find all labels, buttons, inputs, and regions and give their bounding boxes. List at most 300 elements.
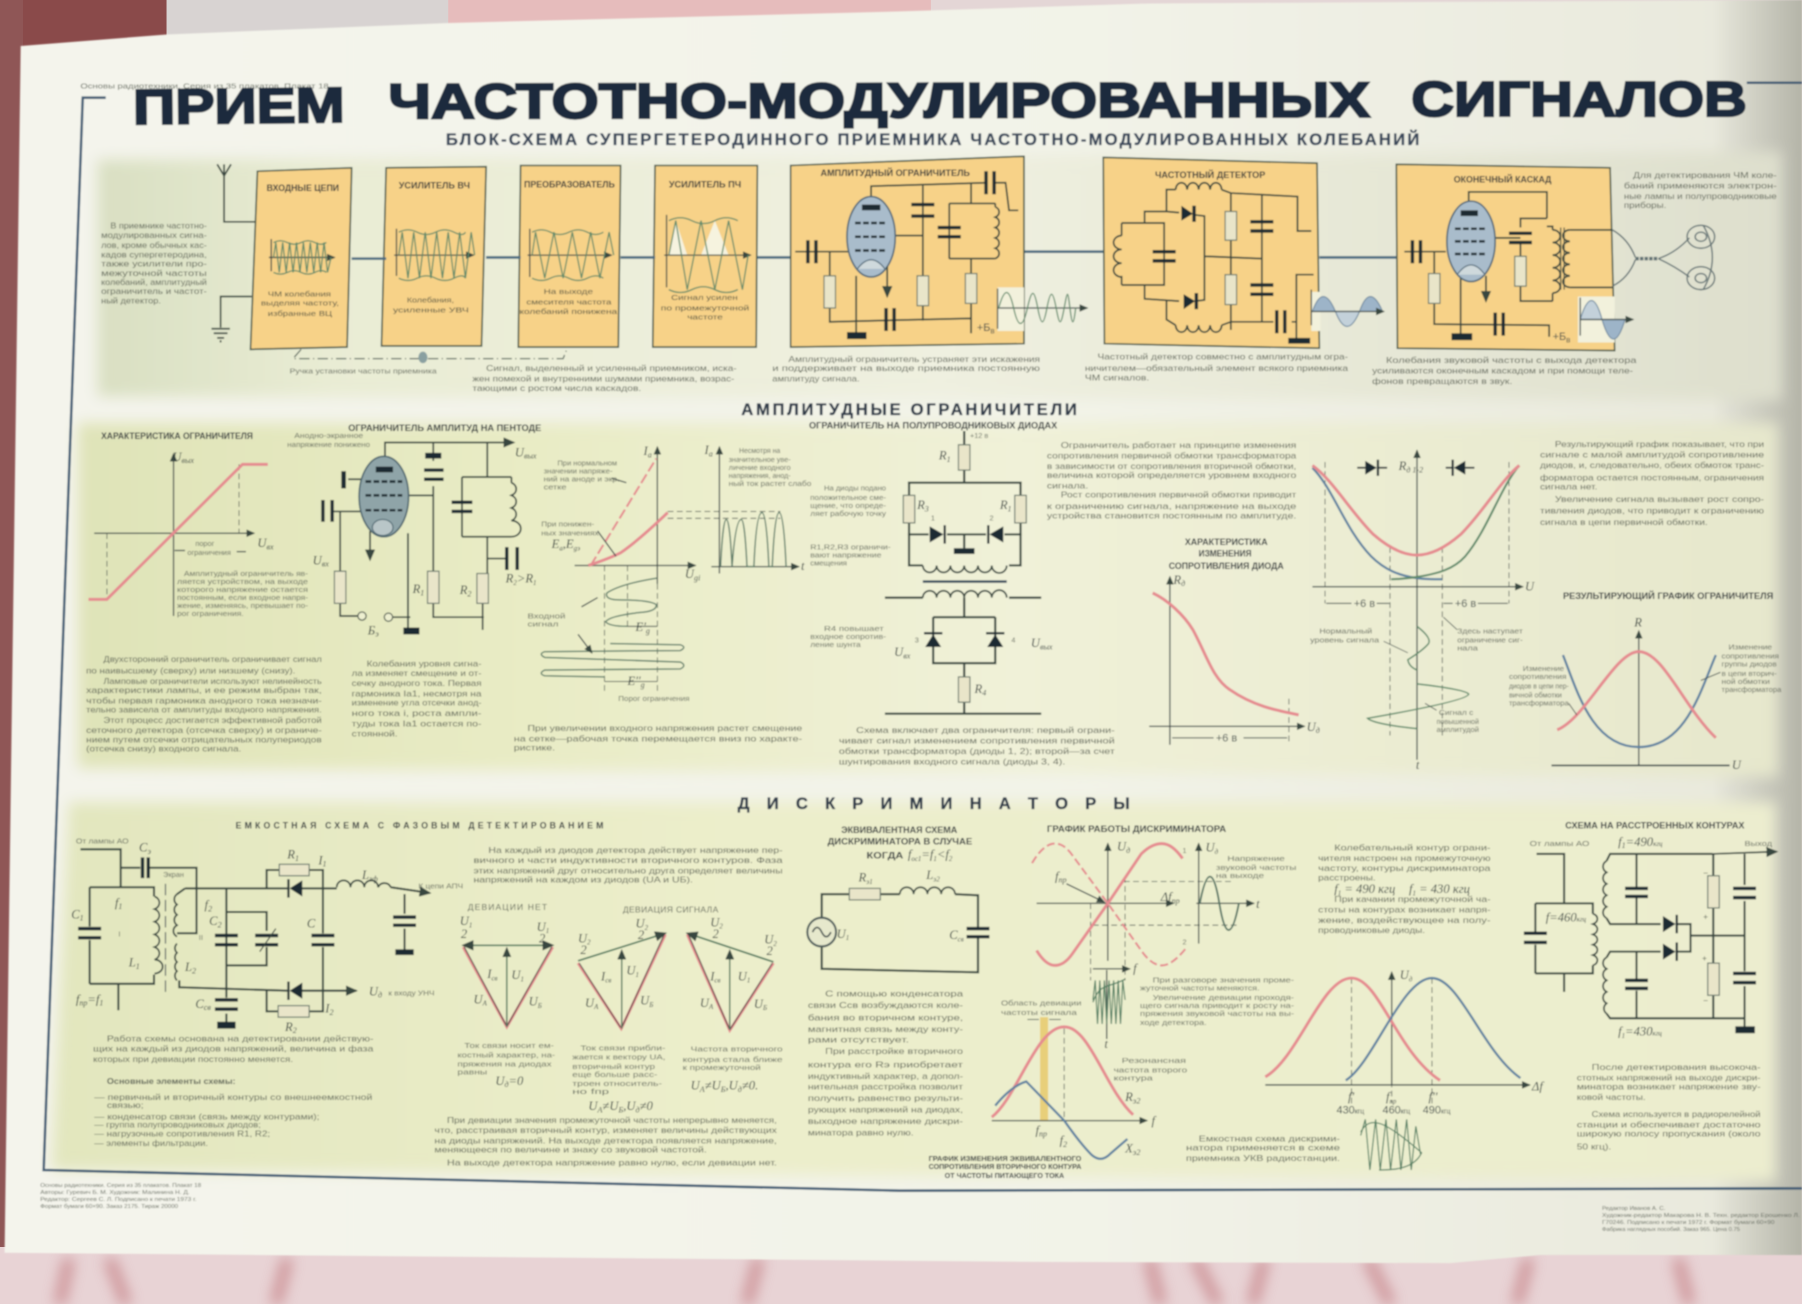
- chart: vector triangle, no deviation: 1: [546, 928, 549, 935]
- circuit: equivalent circuit: C: [949, 928, 958, 942]
- chart: S-curve discriminator: 2: [1183, 938, 1187, 947]
- block: output stage: +Б: [1553, 331, 1566, 343]
- chart: S-curve discriminator: [1032, 839, 1296, 1051]
- chart: resulting limiter graph: Изменение: [1523, 664, 1564, 673]
- text: limiter principle: к ограничению сигнала, напряжение на выходе: [1047, 501, 1297, 511]
- circuit: capacitive phase discriminator: К цепи АПЧ: [418, 881, 463, 890]
- text: two-sided limiter paragraph: Этот процесс достигается эффективной работой: [103, 715, 322, 725]
- text: limiter note: [772, 354, 1041, 384]
- text: output stage note: фонов превращаются в звук.: [1372, 376, 1512, 386]
- subheading: equivalent circuit: ДИСКРИМИНАТОРА В СЛУЧАЕ: [827, 837, 972, 847]
- subheading: equivalent circuit: ЭКВИВАЛЕНТНАЯ СХЕМА: [841, 825, 958, 835]
- block: converter: На выходе: [544, 287, 593, 296]
- text: speech deviation note: ходе детектора.: [1140, 1018, 1207, 1027]
- caption: equivalent resistance graph: СОПРОТИВЛЕНИЯ ВТОРИЧНОГО КОНТУРА: [929, 1162, 1082, 1171]
- chart: equivalent resistance versus frequency: f: [1035, 1123, 1039, 1137]
- subheading: resulting graph: РЕЗУЛЬТИРУЮЩИЙ ГРАФИК ОГРАНИЧИТЕЛЯ: [1563, 590, 1773, 601]
- circuit: capacitive phase discriminator: 2: [208, 904, 212, 913]
- subheading: equivalent circuit: [827, 825, 972, 863]
- connection lines between blocks: [352, 252, 1396, 259]
- text: two-sided limiter paragraph: по наивысшему (сверху) или низшему (снизу).: [86, 665, 295, 675]
- circuit: capacitive phase discriminator: 1: [118, 902, 122, 911]
- text: column two: еще больше расс-: [572, 1070, 658, 1079]
- text: operating principle: которых при девиации постоянно меняется.: [93, 1054, 293, 1064]
- circuit: capacitive phase discriminator: От лампы АО: [76, 837, 129, 846]
- footer: publisher note right: Фабрика наглядных пособий. Заказ 965. Цена 0.75: [1602, 1226, 1740, 1233]
- chart: anode current pulses: t: [801, 559, 805, 573]
- text: main elements list: — нагрузочные сопротивления R1, R2;: [94, 1129, 270, 1139]
- text: diode bias notes: На диоды подано: [824, 484, 886, 493]
- text: resulting graph note: Результирующий график показывает, что при: [1555, 439, 1764, 449]
- text: main elements list: — группа полупроводниковых диодов;: [94, 1119, 261, 1129]
- text: operating principle: [93, 1033, 374, 1064]
- chart: anode current vs grid voltage: Порог ограничения: [618, 694, 690, 703]
- chart: anode current pulses: значительное уве-: [729, 455, 791, 464]
- chart: vector triangle, deviation one: 1: [635, 972, 639, 979]
- block: IF amplifier: УСИЛИТЕЛЬ ПЧ: [669, 179, 741, 189]
- text: oscillator tuning note: чителя настроен на промежуточную: [1318, 853, 1491, 863]
- text: amplified signal note: тающими с ростом числа каскадов.: [472, 383, 641, 393]
- text: main elements list: — конденсатор связи (связь между контурами);: [94, 1111, 319, 1121]
- block: IF amplifier: [653, 165, 757, 347]
- text: amplified signal note: жен помехой и внутренними шумами приемника, возрас-: [472, 374, 735, 384]
- chart: resulting limiter graph: ной обмотки: [1722, 677, 1770, 686]
- circuit: detuned discriminator: 1: [1622, 1033, 1625, 1040]
- chart: anode current vs grid voltage: gi: [694, 573, 700, 582]
- block: converter: [518, 165, 621, 347]
- chart: vector triangle, deviation two: U: [764, 933, 773, 947]
- chart: anode current vs grid voltage: E: [552, 537, 559, 551]
- text: diode bias notes: входное сопротив-: [810, 632, 887, 641]
- circuit: capacitive phase discriminator: 1: [323, 860, 327, 869]
- text: column one: равны: [457, 1068, 487, 1077]
- text: column three: к промежуточной: [683, 1063, 761, 1072]
- circuit: detuned discriminator: =490: [1626, 835, 1654, 849]
- text: diode bias notes: [810, 484, 891, 649]
- circuit: capacitive phase discriminator: f: [115, 896, 118, 910]
- text: column three: д: [738, 1085, 742, 1094]
- circuit: detuned discriminator: кгц: [1653, 841, 1663, 848]
- text: equivalent circuit description: получить равенство результи-: [808, 1093, 963, 1103]
- text: diode bias notes: R4 повышает: [824, 624, 885, 633]
- text: two-sided limiter paragraph: Ламповые ограничители используют нелинейность: [103, 676, 322, 686]
- circuit: capacitive phase discriminator: C: [209, 914, 218, 928]
- circuit: pentode limiter: U: [313, 553, 322, 567]
- text: column two: [572, 1043, 666, 1115]
- text: column two: Ток связи прибли-: [580, 1043, 666, 1052]
- caption: equivalent resistance graph: [929, 1154, 1082, 1180]
- chart: equivalent resistance versus frequency: э2: [1133, 1148, 1140, 1157]
- chart: vector triangle, no deviation: 2: [539, 931, 546, 945]
- circuit: equivalent circuit: э2: [933, 877, 940, 884]
- chart: vector triangle, deviation one: св: [605, 978, 611, 985]
- block: IF amplifier: по промежуточной: [661, 303, 749, 312]
- text: signal level paragraph: гармоника Iа1, несмотря на: [352, 688, 482, 698]
- circuit: capacitive phase discriminator: C: [307, 916, 316, 930]
- text: diode bias notes: ляет рабочую точку: [810, 509, 886, 518]
- circuit: diode limiter: 2: [989, 514, 994, 523]
- chart: vector triangle, deviation two: I: [710, 969, 714, 983]
- text: characteristic description: постоянным, если входное напря-: [177, 593, 309, 602]
- circuit: capacitive phase discriminator: 1: [295, 854, 299, 863]
- chart: anode current vs grid voltage: При нормальном: [557, 458, 617, 467]
- text: input voltage rise: [514, 723, 802, 752]
- text: column one: костный характер, на-: [457, 1050, 556, 1059]
- chart: resulting limiter graph: трансформатора: [1722, 685, 1782, 694]
- subheading: equivalent circuit: ос1: [911, 856, 921, 863]
- text: oscillator tuning note: 1: [1338, 890, 1341, 897]
- chart: limiter characteristic: вх: [267, 542, 274, 551]
- circuit: diode limiter: U: [894, 645, 903, 659]
- circuit: detuned discriminator: 1: [1622, 841, 1626, 850]
- text: resulting graph note: тивления диодов, что приводит к ограничению: [1540, 506, 1765, 516]
- text: signal level paragraph: стоянной.: [352, 729, 398, 739]
- subtitle: БЛОК-СХЕМА СУПЕРГЕТЕРОДИННОГО ПРИЕМНИКА ЧАСТОТНО-МОДУЛИРОВАННЫХ КОЛЕБАНИЙ: [446, 130, 1419, 149]
- circuit: capacitive phase discriminator: U: [369, 984, 378, 998]
- text: input voltage rise: При увеличении входного напряжения растет смещение: [527, 723, 802, 733]
- chart: detuned resonance curves: U: [1400, 968, 1409, 982]
- text: oscillator tuning note: проводниковые диоды.: [1318, 925, 1425, 935]
- circuit: equivalent circuit: св: [958, 936, 964, 943]
- circuit: pentode limiter: 1: [420, 588, 424, 597]
- subheading: pentode limiter: ОГРАНИЧИТЕЛЬ АМПЛИТУД НА ПЕНТОДЕ: [348, 423, 541, 433]
- footer: publisher note right: [1602, 1206, 1800, 1233]
- text: equivalent circuit description: С помощью конденсатора: [825, 988, 963, 998]
- chart: anode current vs grid voltage: При понижен-: [541, 519, 595, 528]
- chart: equivalent resistance versus frequency: э2: [1133, 1096, 1140, 1105]
- icon: antenna: [217, 164, 255, 222]
- chart: S-curve discriminator: Δf: [1161, 890, 1172, 904]
- chart: anode current vs grid voltage: I: [644, 444, 648, 458]
- text: equivalent circuit description: выходное напряжение дискри-: [808, 1116, 963, 1126]
- text: diode bias notes: R1,R2,R3 ограничи-: [810, 542, 891, 551]
- chart: limited wave: [998, 287, 1087, 331]
- chart: anode current vs grid voltage: E': [636, 620, 646, 634]
- circuit: capacitive phase discriminator: L: [185, 960, 192, 974]
- circuit: detuned discriminator: кгц: [1653, 1031, 1662, 1038]
- text: deviation paragraph: что, расстраивая вторичный контур, изменяет величины действующих: [434, 1125, 778, 1135]
- block: output stage: в: [1566, 335, 1570, 344]
- text: deviation paragraph: При девиации значения промежуточной частоты непрерывно меняется,: [447, 1115, 777, 1125]
- block: frequency detector: ЧАСТОТНЫЙ ДЕТЕКТОР: [1155, 169, 1265, 180]
- text: main elements list: Основные элементы схемы:: [107, 1076, 236, 1086]
- circuit: pentode limiter: 2: [513, 580, 517, 587]
- text: oscillator tuning note: f: [1409, 882, 1412, 896]
- footer: publisher note left: Редактор: Сергеев С. Л. Подписано к печати 1973 г.: [40, 1197, 197, 1203]
- chart: diode resistance curve: R: [1173, 573, 1181, 587]
- text: equivalent circuit description: связи Cсв возбуждаются коле-: [808, 1000, 963, 1010]
- circuit: capacitive phase discriminator: д: [378, 991, 382, 1000]
- circuit: capacitive phase discriminator: 1: [136, 962, 140, 971]
- chart: anode current pulses: напряжения, анод-: [729, 471, 791, 480]
- chart: anode current vs grid voltage: ний на аноде и экр.: [544, 475, 619, 484]
- circuit: pentode limiter: R: [506, 572, 513, 586]
- block: input circuits: ВХОДНЫЕ ЦЕПИ: [267, 183, 339, 193]
- label: no deviation: ДЕВИАЦИИ НЕТ: [468, 902, 547, 912]
- chart: resistance versus voltage: нала: [1457, 644, 1479, 653]
- circuit: capacitive phase discriminator: I: [318, 853, 323, 867]
- circuit: diode limiter: R: [917, 498, 925, 512]
- text: note top right: баний применяются электрон-: [1624, 180, 1777, 190]
- circuit: pentode limiter: Б: [368, 623, 375, 637]
- chart: vector triangle, no deviation: 1: [469, 922, 472, 929]
- chart: vector triangle, no deviation: U: [529, 995, 538, 1009]
- block: input circuits: выделяя частоту,: [261, 299, 339, 308]
- text: limiter principle: [1047, 440, 1297, 520]
- chart: vector triangle, deviation one: U: [626, 964, 635, 978]
- text: limiter principle: устройства становится постоянным по амплитуде.: [1047, 510, 1296, 520]
- title: СИГНАЛОВ: [1411, 72, 1747, 127]
- text: column two: ≠U: [602, 1099, 619, 1113]
- caption: equivalent resistance graph: ОТ ЧАСТОТЫ ПИТАЮЩЕГО ТОКА: [945, 1171, 1065, 1180]
- chart: anode current vs grid voltage: ,E: [563, 537, 574, 551]
- circuit: capacitive phase discriminator: пр: [79, 999, 87, 1008]
- chart: vector triangle, no deviation: I: [487, 967, 491, 981]
- chart: S-curve discriminator: t: [1256, 897, 1260, 911]
- text: equivalent circuit description: рующих напряжений на диодах,: [808, 1105, 963, 1115]
- panel: discriminators background: [52, 802, 1776, 1181]
- text: signal level paragraph: ного тока i, роста ампли-: [352, 708, 482, 718]
- text: resulting graph note: [1540, 439, 1765, 527]
- chart: diode resistance curve: д: [1316, 726, 1320, 735]
- circuit: capacitive phase discriminator: L: [129, 956, 136, 970]
- text: detuned circuit note: станции и обеспечивает достаточно: [1577, 1119, 1761, 1129]
- circuit: equivalent circuit: U: [837, 927, 846, 941]
- text: signal level paragraph: [352, 659, 482, 739]
- circuit: capacitive phase discriminator: к входу УНЧ: [388, 988, 435, 997]
- chart: detuned resonance curves: f': [1348, 1090, 1355, 1104]
- text: detector note: [1085, 352, 1348, 382]
- text: amplified signal note: [472, 363, 737, 393]
- chart: vector triangle, no deviation: A: [482, 1001, 488, 1008]
- circuit: pentode limiter: напряжение понижено: [287, 440, 370, 449]
- text: column two: Б: [617, 1106, 623, 1115]
- text: column three: [683, 1045, 783, 1094]
- circuit: capacitive phase discriminator: э: [147, 847, 151, 856]
- chart: vector triangle, deviation one: 2: [645, 925, 649, 932]
- circuit: capacitive phase discriminator: C: [71, 907, 80, 921]
- circuit: equivalent circuit: э1: [866, 879, 873, 886]
- chart: anode current pulses: ный ток растет слабо: [729, 479, 811, 488]
- circuit: capacitive phase discriminator: 2: [329, 1008, 333, 1017]
- text: diode voltage paragraph: напряжений на каждом из диодов (UA и UБ).: [473, 875, 693, 885]
- icon: ground: [211, 297, 252, 342]
- title: ЧАСТОТНО-МОДУЛИРОВАННЫХ: [388, 73, 1370, 129]
- chart: limiter characteristic: ограничения: [187, 548, 231, 557]
- circuit: pentode limiter: э: [375, 630, 379, 639]
- text: limiter principle: величина которой определяется уровнем входного: [1047, 470, 1297, 480]
- chart: resistance versus voltage: повышенной: [1437, 717, 1479, 726]
- text: input voltage rise: на сетке—рабочая точка перемещается вниз по характе-: [514, 733, 802, 743]
- chart: vector triangle, no deviation: [460, 914, 553, 1027]
- chart: limiter characteristic: U: [257, 536, 267, 550]
- circuit: capacitive phase discriminator: I: [325, 1002, 329, 1016]
- text: oscillator tuning note: [1318, 842, 1491, 935]
- text: resulting graph note: Увеличение сигнала вызывает рост сопро-: [1555, 494, 1764, 504]
- chart: limiter characteristic: вых: [182, 456, 194, 465]
- text: column three: ≠0.: [742, 1079, 758, 1093]
- subheading: equivalent circuit: =f: [921, 848, 935, 862]
- chart: S-curve discriminator: д: [1126, 846, 1130, 855]
- footer: publisher note right: Художник-редактор Макарова Н. В. Техн. редактор Ерошенко Л.: [1602, 1213, 1800, 1219]
- text: column two: д: [636, 1106, 640, 1115]
- chart: S-curve discriminator: U: [1117, 839, 1126, 853]
- circuit: capacitive phase discriminator: 2: [293, 1026, 297, 1035]
- chart: vector triangle, no deviation: U: [460, 914, 469, 928]
- block: converter: ПРЕОБРАЗОВАТЕЛЬ: [524, 179, 615, 189]
- circuit: capacitive phase discriminator: R: [285, 1020, 293, 1034]
- chart: vector triangle, no deviation: U: [537, 920, 546, 934]
- text: characteristic description: которого напряжение остается: [177, 585, 308, 594]
- chart: vector triangle, deviation one: I: [601, 969, 605, 983]
- circuit: detuned discriminator: =430: [1625, 1025, 1653, 1039]
- chart: resistance versus voltage: +6 в: [1354, 598, 1375, 610]
- chart: limiter characteristic: порог: [195, 539, 215, 548]
- chart: detuned resonance curves: пр: [1389, 1098, 1397, 1105]
- text: oscillator tuning note: расстроены.: [1318, 872, 1376, 882]
- chart: vector triangle, deviation one: 2: [580, 943, 587, 957]
- circuit: diode limiter: 4: [1011, 635, 1015, 644]
- text: main elements list: — первичный и вторичный контуры со внешнеемкостной: [94, 1092, 373, 1102]
- text: detuned circuit note: широкую полосу пропускания (около: [1577, 1129, 1761, 1139]
- chart: detector output wave: [1311, 290, 1384, 331]
- circuit: capacitive phase discriminator: L: [362, 868, 369, 882]
- chart: vector triangle, deviation two: [687, 915, 777, 1030]
- text: equivalent circuit description: При расстройке вторичного: [825, 1046, 963, 1056]
- text: note top right: ные лампы и полупроводниковые: [1624, 191, 1777, 201]
- chart: anode current vs grid voltage: g: [641, 680, 645, 689]
- block: converter: колебаний понижена: [519, 307, 618, 316]
- block: output stage: ОКОНЕЧНЫЙ КАСКАД: [1454, 174, 1552, 185]
- text: note top right: [1624, 170, 1777, 210]
- chart: anode current vs grid voltage: g: [646, 626, 650, 635]
- text: equivalent circuit description: бания во вторичном контуре,: [808, 1013, 963, 1023]
- chart: resistance versus voltage: +6 в: [1455, 598, 1476, 610]
- chart: resistance versus voltage: амплитудой: [1437, 725, 1479, 734]
- icon: headphones: [1612, 225, 1715, 290]
- chart: limiter characteristic: [88, 450, 274, 616]
- circuit: detuned discriminator: f: [1618, 1025, 1622, 1039]
- circuit: equivalent circuit: R: [858, 871, 866, 885]
- text: scheme description: Схема включает два ограничителя: первый ограни-: [856, 725, 1115, 735]
- block: amplitude limiter: [791, 156, 1087, 347]
- circuit: pentode limiter: >R: [517, 572, 533, 586]
- chart: limiter characteristic: U: [172, 450, 182, 464]
- circuit: capacitive phase discriminator: 2: [218, 920, 222, 929]
- circuit: detuned discriminator: f: [1618, 835, 1622, 849]
- text: characteristic description: Амплитудный ограничитель яв-: [184, 569, 309, 578]
- circuit: pentode limiter: Анодно-экранное: [294, 431, 363, 440]
- chart: detuned resonance curves: д: [1409, 977, 1413, 984]
- chart: equivalent resistance versus frequency: пр: [1039, 1130, 1047, 1139]
- text: scheme description: обмотки трансформатора (диоды 1, 2); второй—за счет: [839, 746, 1115, 756]
- circuit: capacitive phase discriminator: II: [199, 933, 203, 942]
- chart: vector triangle, no deviation: 1: [521, 977, 524, 984]
- subheading: equivalent circuit: 1: [933, 856, 937, 863]
- chart: anode current vs grid voltage: Входной: [527, 611, 565, 620]
- text: detector note: ничителем—обязательный элемент всякого приемника: [1085, 363, 1348, 373]
- chart: equivalent resistance versus frequency: контура: [1114, 1073, 1154, 1082]
- chart: vector triangle, deviation one: U: [578, 931, 587, 945]
- chart: detuned resonance curves: 460кгц: [1383, 1105, 1410, 1117]
- chart: detuned resonance curves: [1265, 968, 1544, 1117]
- text: detuned circuit note: минатора возникает напряжение зву-: [1577, 1082, 1761, 1092]
- circuit: detuned discriminator: f=460кгц: [1546, 911, 1587, 925]
- text: equivalent circuit description: минатора равно нулю.: [808, 1128, 914, 1138]
- subheading: diode resistance: ИЗМЕНЕНИЯ: [1199, 548, 1252, 558]
- chart: anode current pulses: Несмотря на: [739, 446, 781, 455]
- circuit: capacitive phase discriminator: Экран: [163, 870, 184, 879]
- subheading: equivalent circuit: f: [908, 848, 911, 862]
- text: column two: U: [588, 1099, 598, 1113]
- subheading: diode resistance: ХАРАКТЕРИСТИКА: [1185, 537, 1268, 547]
- text: speech deviation note: пряжения звуковой частоты на вы-: [1140, 1009, 1295, 1018]
- chart: anode current pulses: [703, 443, 811, 574]
- chart: vector triangle, deviation two: св: [714, 978, 720, 985]
- chart: equivalent resistance versus frequency: f: [1152, 1114, 1157, 1128]
- chart: resulting limiter graph: группы диодов: [1722, 660, 1777, 669]
- text: limiter principle: Рост сопротивления первичной обмотки приводит: [1061, 490, 1296, 500]
- chart: S-curve discriminator: f: [1055, 869, 1059, 883]
- block: RF amplifier: Колебания,: [407, 295, 454, 304]
- text: intro left: межуточной частоты: [101, 268, 207, 278]
- circuit: detuned discriminator: От лампы АО: [1530, 839, 1590, 848]
- text: intro left: ный детектор.: [101, 295, 161, 305]
- text: equivalent circuit description: индуктивный характер, а допол-: [808, 1071, 963, 1081]
- chart: resulting limiter graph: диодов в цепи пер-: [1509, 681, 1569, 690]
- chart: vector triangle, deviation two: Б: [762, 1005, 767, 1012]
- text: oscillator tuning note: = 490 кгц: [1341, 882, 1395, 896]
- text: resulting graph note: диодов, и, следовательно, обеих обмоток транс-: [1540, 460, 1764, 470]
- panel: receiver block diagram background: [98, 152, 1781, 400]
- text: detector note: ЧМ сигналов.: [1085, 372, 1149, 382]
- chart: resulting limiter graph: вичной обмотки: [1509, 691, 1562, 700]
- subheading: capacitive phase detection scheme: ЕМКОСТНАЯ СХЕМА С ФАЗОВЫМ ДЕТЕКТИРОВАНИЕМ: [236, 821, 603, 831]
- text: oscillator tuning note: При качании промежуточной ча-: [1334, 894, 1491, 904]
- circuit: capacitive phase discriminator: зф: [368, 875, 378, 884]
- text: diode voltage paragraph: [473, 845, 783, 885]
- circuit: capacitive phase discriminator: f: [76, 992, 79, 1006]
- text: diode bias notes: щение, что опреде-: [810, 501, 887, 510]
- text: column one: =0: [509, 1074, 524, 1088]
- chart: resistance versus voltage: Сигнал с: [1439, 708, 1474, 717]
- text: oscillator tuning note: 1: [1412, 890, 1416, 897]
- text: intro left: модулированных сигна-: [101, 230, 207, 240]
- circuit: pentode limiter: вх: [322, 560, 329, 569]
- chart: FM wave under curves: [1361, 1119, 1422, 1170]
- circuit: capacitive phase discriminator: I: [118, 930, 120, 939]
- block: output stage: [1396, 164, 1633, 351]
- text: column two: ,U: [623, 1099, 636, 1113]
- circuit: diode limiter: 4: [982, 688, 986, 697]
- chart: anode current vs grid voltage: а: [559, 546, 563, 553]
- series note: Основы радиотехники. Серия из 35 плакатов. Плакат 18: [80, 81, 329, 90]
- text: deviation paragraph: На выходе детектора напряжение равно нулю, если девиации нет.: [447, 1157, 777, 1167]
- text: signal level paragraph: Колебания уровня сигна-: [367, 659, 482, 669]
- chart: equivalent resistance versus frequency: R: [1125, 1090, 1133, 1104]
- chart: equivalent resistance versus frequency: X: [1125, 1142, 1133, 1156]
- text: column two: но fпр: [572, 1087, 609, 1096]
- subheading: equivalent circuit: <f: [937, 848, 950, 862]
- text: limiter note: амплитуду сигнала.: [772, 374, 860, 384]
- chart: vector triangle, deviation two: U: [738, 969, 747, 983]
- text: scheme description: шунтирования входного сигнала (диоды 3, 4).: [839, 756, 1065, 766]
- text: column three: A: [699, 1085, 705, 1094]
- text: detuned circuit note: [1577, 1062, 1761, 1151]
- block: input circuits: избранные ВЦ: [268, 309, 333, 318]
- footer: publisher note right: Г70246. Подписано к печати 1972 г. Формат бумаги 60×90: [1602, 1220, 1774, 1226]
- circuit: capacitive phase discriminator: 2: [192, 966, 196, 975]
